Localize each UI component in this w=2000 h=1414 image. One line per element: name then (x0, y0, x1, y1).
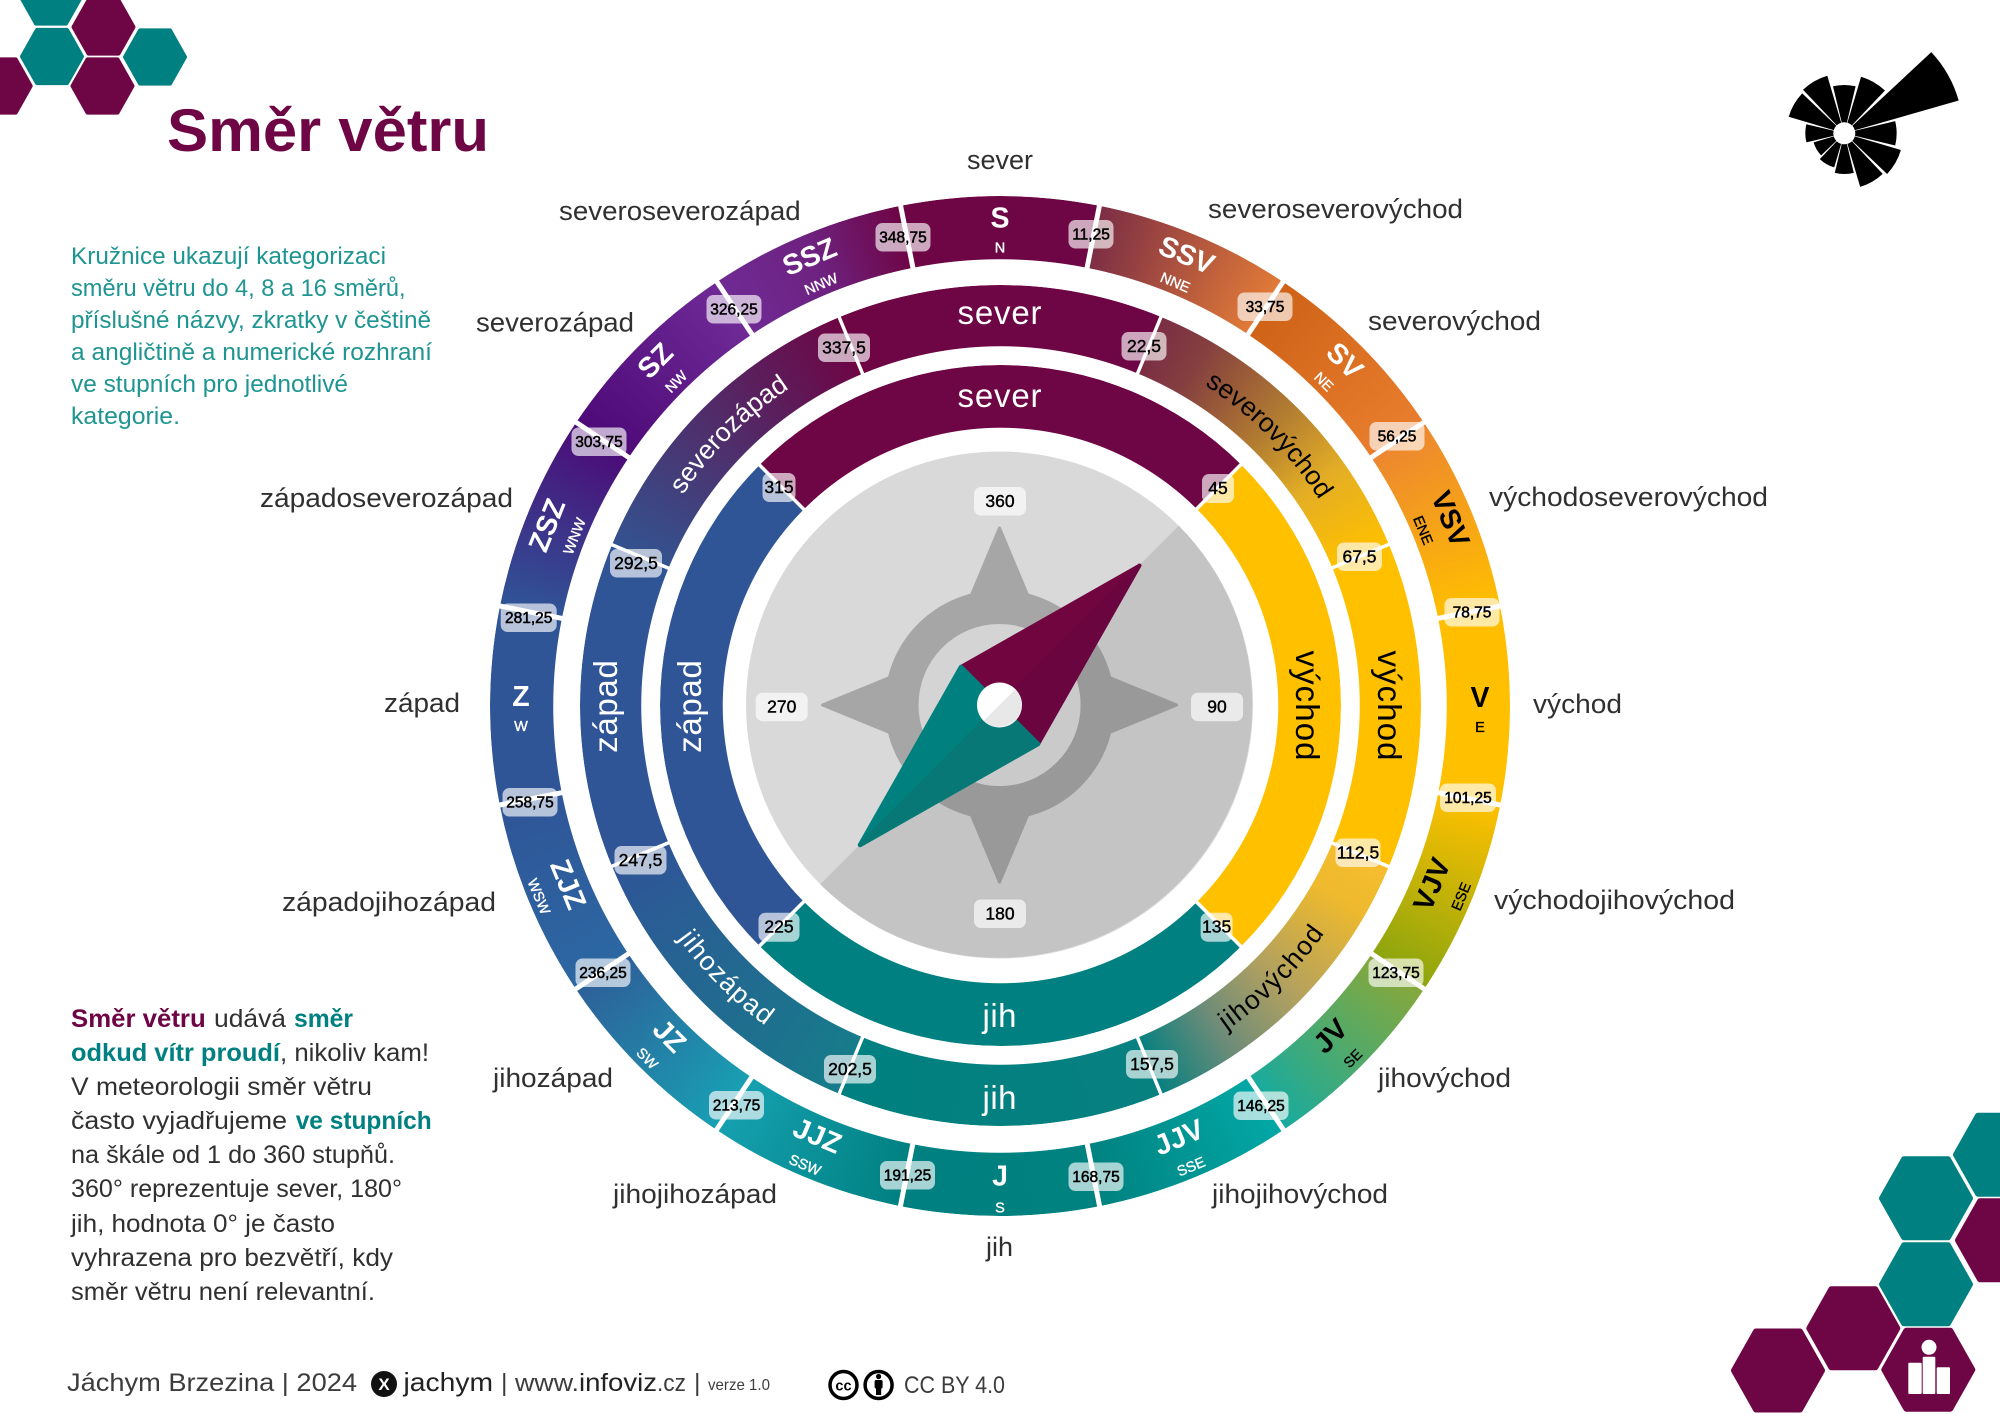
outer direction names (260, 145, 1768, 1262)
outer direction names: východojihovýchod (1494, 885, 1735, 915)
outer direction names: východoseverovýchod (1489, 482, 1768, 512)
outer ring direction abbreviations: SW (633, 1045, 661, 1073)
outer ring direction abbreviations: ZJZ (543, 855, 592, 914)
outer ring direction abbreviations: JJV (1150, 1113, 1209, 1162)
outer ring direction abbreviations: SE (1341, 1046, 1366, 1072)
outer direction names: sever (967, 145, 1033, 175)
outer ring direction abbreviations: ESE (1449, 880, 1475, 913)
outer ring direction abbreviations: V (1470, 682, 1490, 714)
outer ring direction abbreviations: SSZ (778, 232, 841, 283)
middle ring degree labels: 112,5 (1337, 842, 1379, 862)
outer direction names: západoseverozápad (260, 483, 513, 513)
outer ring direction abbreviations: Z (512, 681, 530, 713)
outer direction names: jihojihozápad (612, 1179, 777, 1209)
outer ring degree labels: 281,25 (505, 610, 552, 627)
middle ring degree labels: 157,5 (1130, 1054, 1174, 1074)
outer ring direction abbreviations: VSV (1424, 487, 1476, 552)
footer: .cz (657, 1370, 686, 1397)
outer direction names: západojihozápad (282, 887, 496, 917)
outer ring direction abbreviations: W (514, 719, 528, 735)
outer ring direction abbreviations: JJZ (788, 1112, 846, 1161)
middle ring names: západ (587, 660, 624, 753)
outer ring degree labels: 56,25 (1378, 428, 1416, 446)
title: Směr větru (167, 97, 489, 164)
outer direction names: západ (384, 688, 460, 718)
explanation text: odkud vítr proudí (71, 1039, 281, 1067)
outer ring direction abbreviations: SSW (786, 1152, 823, 1180)
middle ring degree labels: 202,5 (828, 1059, 872, 1079)
intro text (71, 243, 432, 430)
ring dividers (498, 203, 1502, 1208)
intro text: kategorie. (71, 403, 180, 430)
compass degree labels: 360 (985, 491, 1015, 511)
icon: wind rose (1787, 51, 1962, 188)
middle ring: 8 directions (580, 285, 1420, 1126)
middle ring degree labels: 67,5 (1342, 546, 1377, 566)
outer ring direction abbreviations: SZ (631, 337, 680, 385)
intro text: příslušné názvy, zkratky v češtině (71, 307, 431, 334)
outer direction names: severozápad (476, 308, 634, 338)
outer ring degree labels: 33,75 (1246, 299, 1284, 316)
outer direction names: jihojihovýchod (1211, 1179, 1388, 1209)
inner ring: 4 directions (660, 365, 1340, 1046)
outer ring direction abbreviations: N (995, 240, 1005, 256)
explanation text: ve stupních (296, 1107, 432, 1135)
outer ring direction abbreviations: SV (1320, 336, 1369, 386)
outer ring degree labels: 258,75 (506, 794, 554, 812)
compass needle (860, 566, 1140, 845)
footer (67, 1367, 1005, 1399)
outer ring direction abbreviations: SSV (1154, 230, 1219, 281)
explanation text (70, 1005, 432, 1306)
middle ring degree labels: 22,5 (1127, 336, 1161, 356)
outer ring degree labels: 303,75 (575, 434, 623, 451)
intro text: směru větru do 4, 8 a 16 směrů, (71, 275, 406, 302)
outer ring degree labels: 101,25 (1444, 790, 1492, 807)
middle ring names (587, 294, 1408, 1118)
compass disc (746, 452, 1253, 958)
compass degree labels (756, 487, 1243, 928)
outer ring degree labels: 236,25 (579, 965, 627, 982)
intro text: ve stupních pro jednotlivé (71, 371, 348, 398)
footer: CC BY 4.0 (904, 1372, 1005, 1399)
outer ring direction abbreviations: SSE (1175, 1154, 1208, 1180)
outer ring direction abbreviations: VJV (1407, 854, 1457, 916)
inner ring names: východ (1289, 650, 1326, 760)
inner ring names: jih (982, 997, 1016, 1034)
footer: | (694, 1369, 700, 1397)
inner ring degree labels: 315 (764, 477, 794, 497)
explanation text: udává (214, 1005, 286, 1033)
outer ring direction abbreviations: S (995, 1200, 1005, 1216)
explanation text: na škále od 1 do 360 stupňů. (71, 1141, 395, 1169)
outer ring direction abbreviations: NNW (802, 271, 841, 299)
explanation text: Směr větru (71, 1005, 206, 1033)
inner ring degree labels: 45 (1208, 478, 1228, 498)
outer ring direction abbreviations: NNE (1158, 270, 1192, 297)
compass star (822, 528, 1176, 882)
explanation text: směr větru není relevantní. (71, 1278, 375, 1306)
middle ring names: jihozápad (673, 928, 776, 1025)
outer ring degree labels: 123,75 (1372, 965, 1420, 982)
compass degree labels: 180 (985, 904, 1015, 924)
outer ring degree labels: 213,75 (713, 1098, 760, 1114)
outer ring degree labels: 326,25 (710, 302, 758, 318)
outer ring direction abbreviations: JV (1307, 1013, 1355, 1060)
outer ring direction abbreviations (512, 202, 1490, 1216)
intro text: Kružnice ukazují kategorizaci (71, 243, 386, 270)
outer ring direction abbreviations: NE (1310, 370, 1336, 395)
inner ring degree labels: 225 (764, 917, 794, 937)
hexagons bottom right (1734, 1116, 2000, 1410)
intro text: a angličtině a numerické rozhraní (71, 339, 432, 366)
footer: jachym (402, 1367, 493, 1397)
outer ring direction abbreviations: J (992, 1160, 1008, 1192)
explanation text: , nikoliv kam! (280, 1039, 429, 1067)
footer: Jáchym Brzezina | 2024 (67, 1369, 357, 1397)
hexagons top left (0, 0, 185, 113)
outer ring direction abbreviations: ZSZ (523, 495, 572, 556)
middle ring names: severovýchod (1206, 376, 1334, 498)
outer ring degree labels: 168,75 (1072, 1169, 1120, 1186)
outer ring degree labels (501, 220, 1500, 1191)
explanation text: vyhrazena pro bezvětří, kdy (71, 1244, 394, 1272)
outer direction names: jih (985, 1232, 1013, 1262)
outer ring direction abbreviations: WNW (561, 516, 590, 557)
middle ring names: severozápad (673, 374, 788, 493)
outer ring direction abbreviations: S (990, 202, 1010, 234)
footer: | (501, 1369, 508, 1397)
outer ring degree labels: 191,25 (884, 1168, 931, 1184)
outer ring direction abbreviations: JZ (646, 1013, 692, 1060)
outer direction names: jihozápad (492, 1063, 613, 1093)
explanation text: často vyjadřujeme (71, 1107, 287, 1135)
outer direction names: severovýchod (1368, 306, 1541, 336)
footer: infoviz (579, 1369, 657, 1397)
middle ring degree labels: 337,5 (822, 338, 866, 358)
explanation text: 360° reprezentuje sever, 180° (71, 1175, 402, 1203)
outer ring degree labels: 78,75 (1453, 604, 1491, 622)
footer: www. (514, 1370, 579, 1397)
inner ring degree labels (758, 473, 1234, 942)
compass degree labels: 90 (1207, 697, 1227, 717)
middle ring names: jihovýchod (1216, 923, 1324, 1036)
explanation text: V meteorologii směr větru (71, 1073, 372, 1101)
outer ring: 16 directions (490, 196, 1510, 1216)
middle ring degree labels: 247,5 (619, 850, 662, 870)
footer: cc (835, 1378, 852, 1394)
icon: infoviz logo (1908, 1340, 1950, 1394)
middle ring names: východ (1371, 650, 1408, 760)
outer direction names: severoseverozápad (559, 196, 801, 226)
compass degree labels: 270 (767, 697, 797, 717)
outer direction names: jihovýchod (1377, 1063, 1511, 1093)
inner ring names (671, 377, 1326, 1034)
outer ring direction abbreviations: WSW (524, 877, 553, 917)
outer ring degree labels: 348,75 (879, 230, 927, 246)
outer ring degree labels: 11,25 (1072, 226, 1110, 244)
inner ring names: západ (671, 660, 708, 753)
outer direction names: severoseverovýchod (1208, 194, 1463, 224)
outer direction names: východ (1533, 689, 1622, 719)
inner ring names: sever (958, 377, 1042, 414)
middle ring names: jih (982, 1079, 1016, 1116)
footer: verze 1.0 (708, 1377, 770, 1394)
inner ring degree labels: 135 (1202, 917, 1231, 937)
middle ring degree labels (610, 332, 1382, 1084)
middle ring degree labels: 292,5 (614, 553, 658, 573)
footer: X (378, 1375, 390, 1394)
outer ring degree labels: 146,25 (1237, 1098, 1285, 1115)
middle ring names: sever (958, 294, 1042, 331)
explanation text: jih, hodnota 0° je často (70, 1210, 335, 1238)
outer ring direction abbreviations: E (1475, 720, 1485, 736)
explanation text: směr (294, 1005, 353, 1033)
outer ring direction abbreviations: ENE (1409, 514, 1435, 548)
outer ring direction abbreviations: NW (663, 368, 691, 397)
